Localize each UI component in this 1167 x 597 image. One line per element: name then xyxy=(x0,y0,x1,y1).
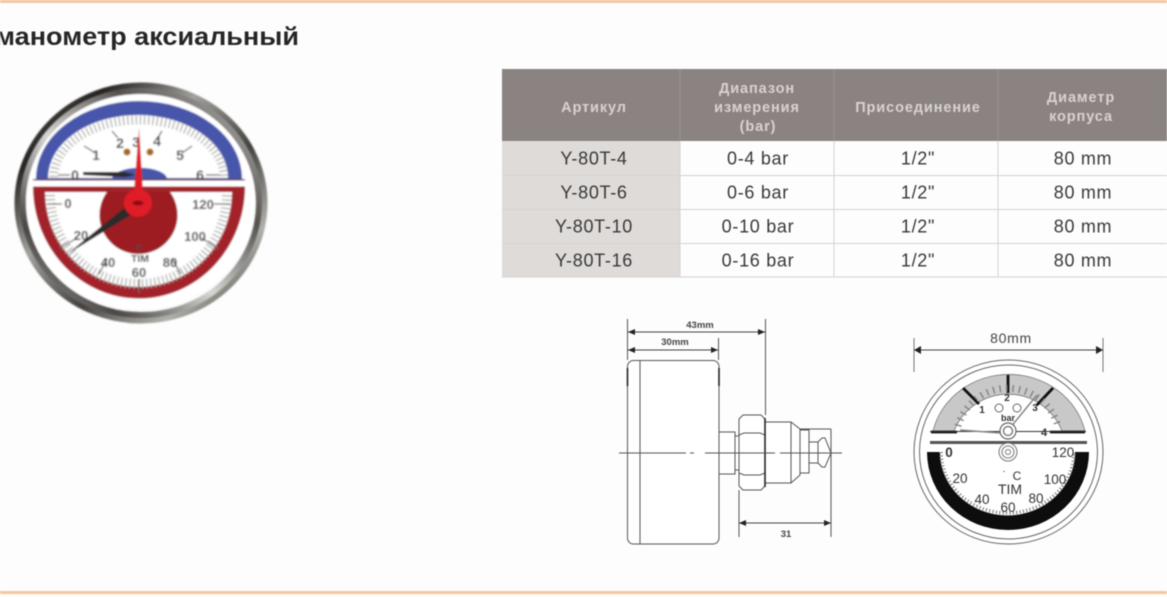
temperature scale numbers: 20 xyxy=(74,228,88,243)
table header: измерения xyxy=(714,100,800,116)
temperature labels: 60 xyxy=(1000,500,1016,515)
pressure dial: blue band xyxy=(33,101,245,180)
row Y-80T-6: 1/2" xyxy=(901,182,935,202)
side view technical drawing xyxy=(619,319,842,544)
dimension 43mm: 43mm xyxy=(686,320,714,331)
grey pressure band xyxy=(933,374,1085,431)
temperature scale numbers: 100 xyxy=(184,229,206,244)
indicator dots xyxy=(124,148,154,156)
needles xyxy=(960,395,1037,433)
row Y-80T-4: Y-80T-4 xyxy=(560,148,628,168)
row Y-80T-6: Y-80T-6 xyxy=(560,182,628,202)
row Y-80T-10: 1/2" xyxy=(901,216,935,236)
table header: Присоединение xyxy=(855,100,981,116)
fitting xyxy=(719,415,831,490)
row Y-80T-16: 80 mm xyxy=(1054,250,1112,270)
pressure major ticks xyxy=(931,375,1085,432)
major ticks xyxy=(48,131,230,293)
temperature labels: 40 xyxy=(974,492,990,507)
lower hub xyxy=(999,443,1017,461)
dimension 30mm: 30mm xyxy=(661,337,689,348)
bottom border xyxy=(0,591,1167,594)
temperature labels: 0 xyxy=(945,445,953,460)
row Y-80T-10: 80 mm xyxy=(1054,216,1112,236)
brand and unit xyxy=(998,464,1022,497)
temperature labels xyxy=(945,445,1074,515)
red hub xyxy=(124,189,152,217)
pressure labels: 3 xyxy=(1032,403,1038,414)
indicator circles xyxy=(995,404,1021,412)
table grid xyxy=(502,141,1167,277)
table header: Артикул xyxy=(561,100,627,116)
row Y-80T-6 xyxy=(560,182,1112,202)
red needle xyxy=(134,128,143,192)
upper hub xyxy=(1000,423,1016,439)
temperature scale numbers: 40 xyxy=(101,255,115,270)
outer rings xyxy=(914,360,1103,544)
temperature dial: red band xyxy=(33,186,245,299)
pressure minor ticks xyxy=(958,388,1058,426)
central disk xyxy=(100,192,178,254)
dimension 30mm xyxy=(628,337,718,353)
pressure labels: 2 xyxy=(1004,393,1010,404)
table header: корпуса xyxy=(1049,109,1113,125)
temperature scale numbers xyxy=(64,196,214,280)
extension lines xyxy=(628,319,831,537)
dimension 80mm: 80mm xyxy=(990,330,1032,346)
title: манометр аксиальный xyxy=(0,23,299,51)
top border xyxy=(0,0,1167,3)
pressure scale numbers: 3 xyxy=(132,134,140,150)
brand and unit: TIM xyxy=(998,481,1022,497)
specification table xyxy=(502,69,1167,277)
pressure scale numbers xyxy=(71,133,204,183)
pressure scale numbers: 1 xyxy=(92,147,100,163)
row Y-80T-10 xyxy=(555,216,1112,236)
brand and unit: . xyxy=(1003,464,1005,475)
dimension 43mm xyxy=(628,320,765,335)
pressure scale numbers: 5 xyxy=(176,147,184,163)
row Y-80T-6: 0-6 bar xyxy=(727,182,789,202)
row Y-80T-16: 1/2" xyxy=(901,250,935,270)
row Y-80T-10: 0-10 bar xyxy=(722,216,794,236)
row Y-80T-6: 80 mm xyxy=(1054,182,1112,202)
row Y-80T-16: Y-80T-16 xyxy=(555,250,633,270)
product photo: gauge xyxy=(18,86,264,320)
pressure labels: 1 xyxy=(979,405,985,416)
pressure scale numbers: 6 xyxy=(196,167,204,183)
temperature labels: 80 xyxy=(1028,491,1044,506)
pressure scale numbers: 2 xyxy=(116,135,124,151)
row Y-80T-4 xyxy=(560,148,1112,168)
brand label: TIM xyxy=(131,253,149,265)
temperature minor ticks xyxy=(941,452,1074,513)
brand and unit: C xyxy=(1013,469,1022,483)
upper black needle xyxy=(83,172,136,177)
pressure scale numbers: 4 xyxy=(153,133,161,149)
black temperature band xyxy=(927,452,1089,530)
temperature scale numbers: 0 xyxy=(64,196,72,211)
temperature scale numbers: 60 xyxy=(132,265,146,280)
brand label xyxy=(131,243,149,265)
temperature scale numbers: 80 xyxy=(163,255,177,270)
row Y-80T-4: 80 mm xyxy=(1054,148,1112,168)
table header: (bar) xyxy=(740,119,776,135)
temperature labels: 100 xyxy=(1044,472,1066,487)
dimension 31 xyxy=(739,520,831,540)
table header: Диапазон xyxy=(719,81,795,97)
centre axis xyxy=(619,452,842,454)
pressure labels: 4 xyxy=(1041,427,1048,439)
divider lines xyxy=(930,430,1086,432)
row Y-80T-16 xyxy=(555,250,1112,270)
chrome bezel xyxy=(18,86,264,320)
dimension 80mm xyxy=(914,330,1103,372)
temperature labels: 20 xyxy=(952,471,968,486)
table header xyxy=(502,69,1167,141)
temperature scale numbers: 120 xyxy=(192,197,214,212)
row Y-80T-10: Y-80T-10 xyxy=(555,216,633,236)
pressure labels xyxy=(979,393,1048,439)
row Y-80T-4: 0-4 bar xyxy=(727,148,789,168)
front view technical drawing xyxy=(914,330,1103,544)
pressure labels: bar xyxy=(1001,413,1015,423)
brand label: C xyxy=(136,243,143,253)
gauge body xyxy=(628,360,719,544)
row Y-80T-4: 1/2" xyxy=(901,148,935,168)
temperature labels: 120 xyxy=(1052,445,1074,460)
article column background xyxy=(502,141,680,277)
table header: Диаметр xyxy=(1047,90,1115,106)
dimension 31: 31 xyxy=(781,529,792,540)
pressure scale numbers: 0 xyxy=(71,167,79,183)
lower black needle xyxy=(66,208,132,255)
row Y-80T-16: 0-16 bar xyxy=(722,250,794,270)
